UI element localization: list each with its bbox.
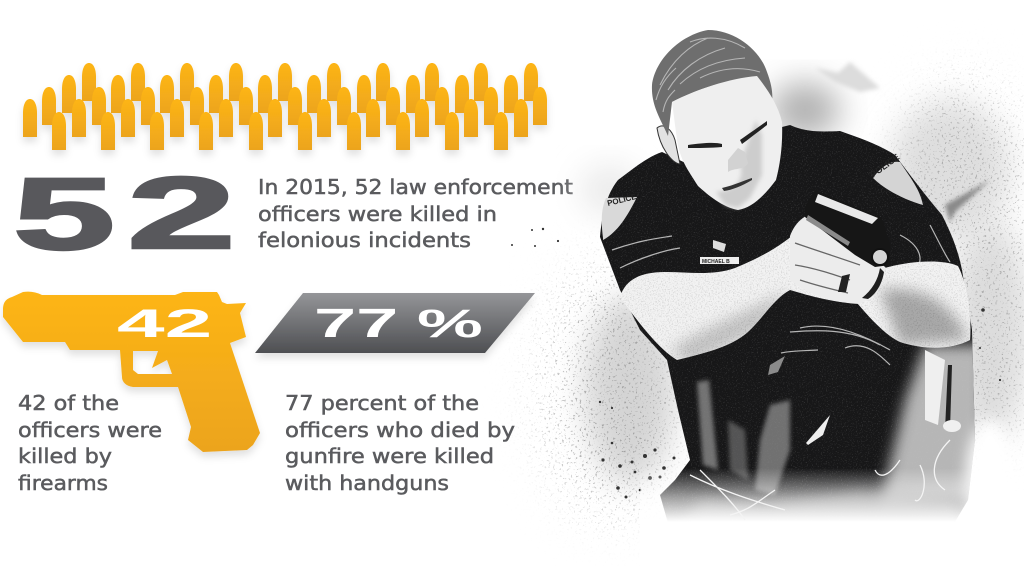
panel: handgun 42 xyxy=(3,292,260,452)
text: 42 killed by firearms: officers were xyxy=(18,418,162,442)
text: 42 killed by firearms xyxy=(18,391,162,495)
shoulder patches: POLICE xyxy=(606,192,638,208)
head xyxy=(652,30,790,210)
shoulder patches: MICHAEL B xyxy=(702,259,730,265)
hands xyxy=(790,212,886,304)
splatter dots xyxy=(511,228,1001,499)
big number 52: 2 xyxy=(127,157,236,270)
neck xyxy=(690,125,790,210)
text: 52 officers killed: In 2015, 52 law enforcement xyxy=(258,175,573,199)
text: 77 percent with handguns xyxy=(285,391,515,495)
big number 52: 5 xyxy=(13,158,115,271)
face xyxy=(672,76,782,210)
shoulder patches xyxy=(602,152,923,265)
banner: 77 percent xyxy=(255,293,535,353)
text: 52 officers killed: felonious incidents xyxy=(258,228,471,252)
fade at the bottom xyxy=(640,468,1024,528)
hair xyxy=(652,30,772,136)
splatter background xyxy=(502,30,1024,546)
text: 77 percent with handguns: 77 percent of the xyxy=(285,391,479,415)
banner: 77 percent: 77 xyxy=(314,300,398,346)
arms xyxy=(620,228,970,360)
text: 77 percent with handguns: gunfire were killed xyxy=(285,444,494,468)
uniform grain and highlights xyxy=(600,127,975,516)
handgun xyxy=(805,190,890,267)
text: 52 officers killed xyxy=(258,175,573,252)
text: 42 killed by firearms: firearms xyxy=(18,471,108,495)
arm shading xyxy=(620,238,970,360)
ear xyxy=(657,126,680,164)
shoulder patches: POLICE xyxy=(868,152,901,180)
number 42: 42 xyxy=(117,302,212,346)
icon: gold pistol xyxy=(3,292,260,452)
photo: officer aiming a handgun xyxy=(502,30,1024,546)
splashes xyxy=(690,440,950,520)
face shading xyxy=(688,120,767,208)
text: 77 percent with handguns: officers who died by xyxy=(285,418,515,442)
text: 52 officers killed: officers were killed in xyxy=(258,202,497,226)
soft edge on right side xyxy=(966,420,1014,540)
hair streaks xyxy=(656,38,760,112)
text: 42 killed by firearms: 42 of the xyxy=(18,391,119,415)
banner: 77 percent: % xyxy=(417,301,483,346)
torso and uniform xyxy=(600,125,975,530)
text: 77 percent with handguns: with handguns xyxy=(285,471,449,495)
bullets row xyxy=(23,63,547,150)
text: 42 killed by firearms: killed by xyxy=(18,444,112,468)
big number 52 xyxy=(13,157,236,271)
